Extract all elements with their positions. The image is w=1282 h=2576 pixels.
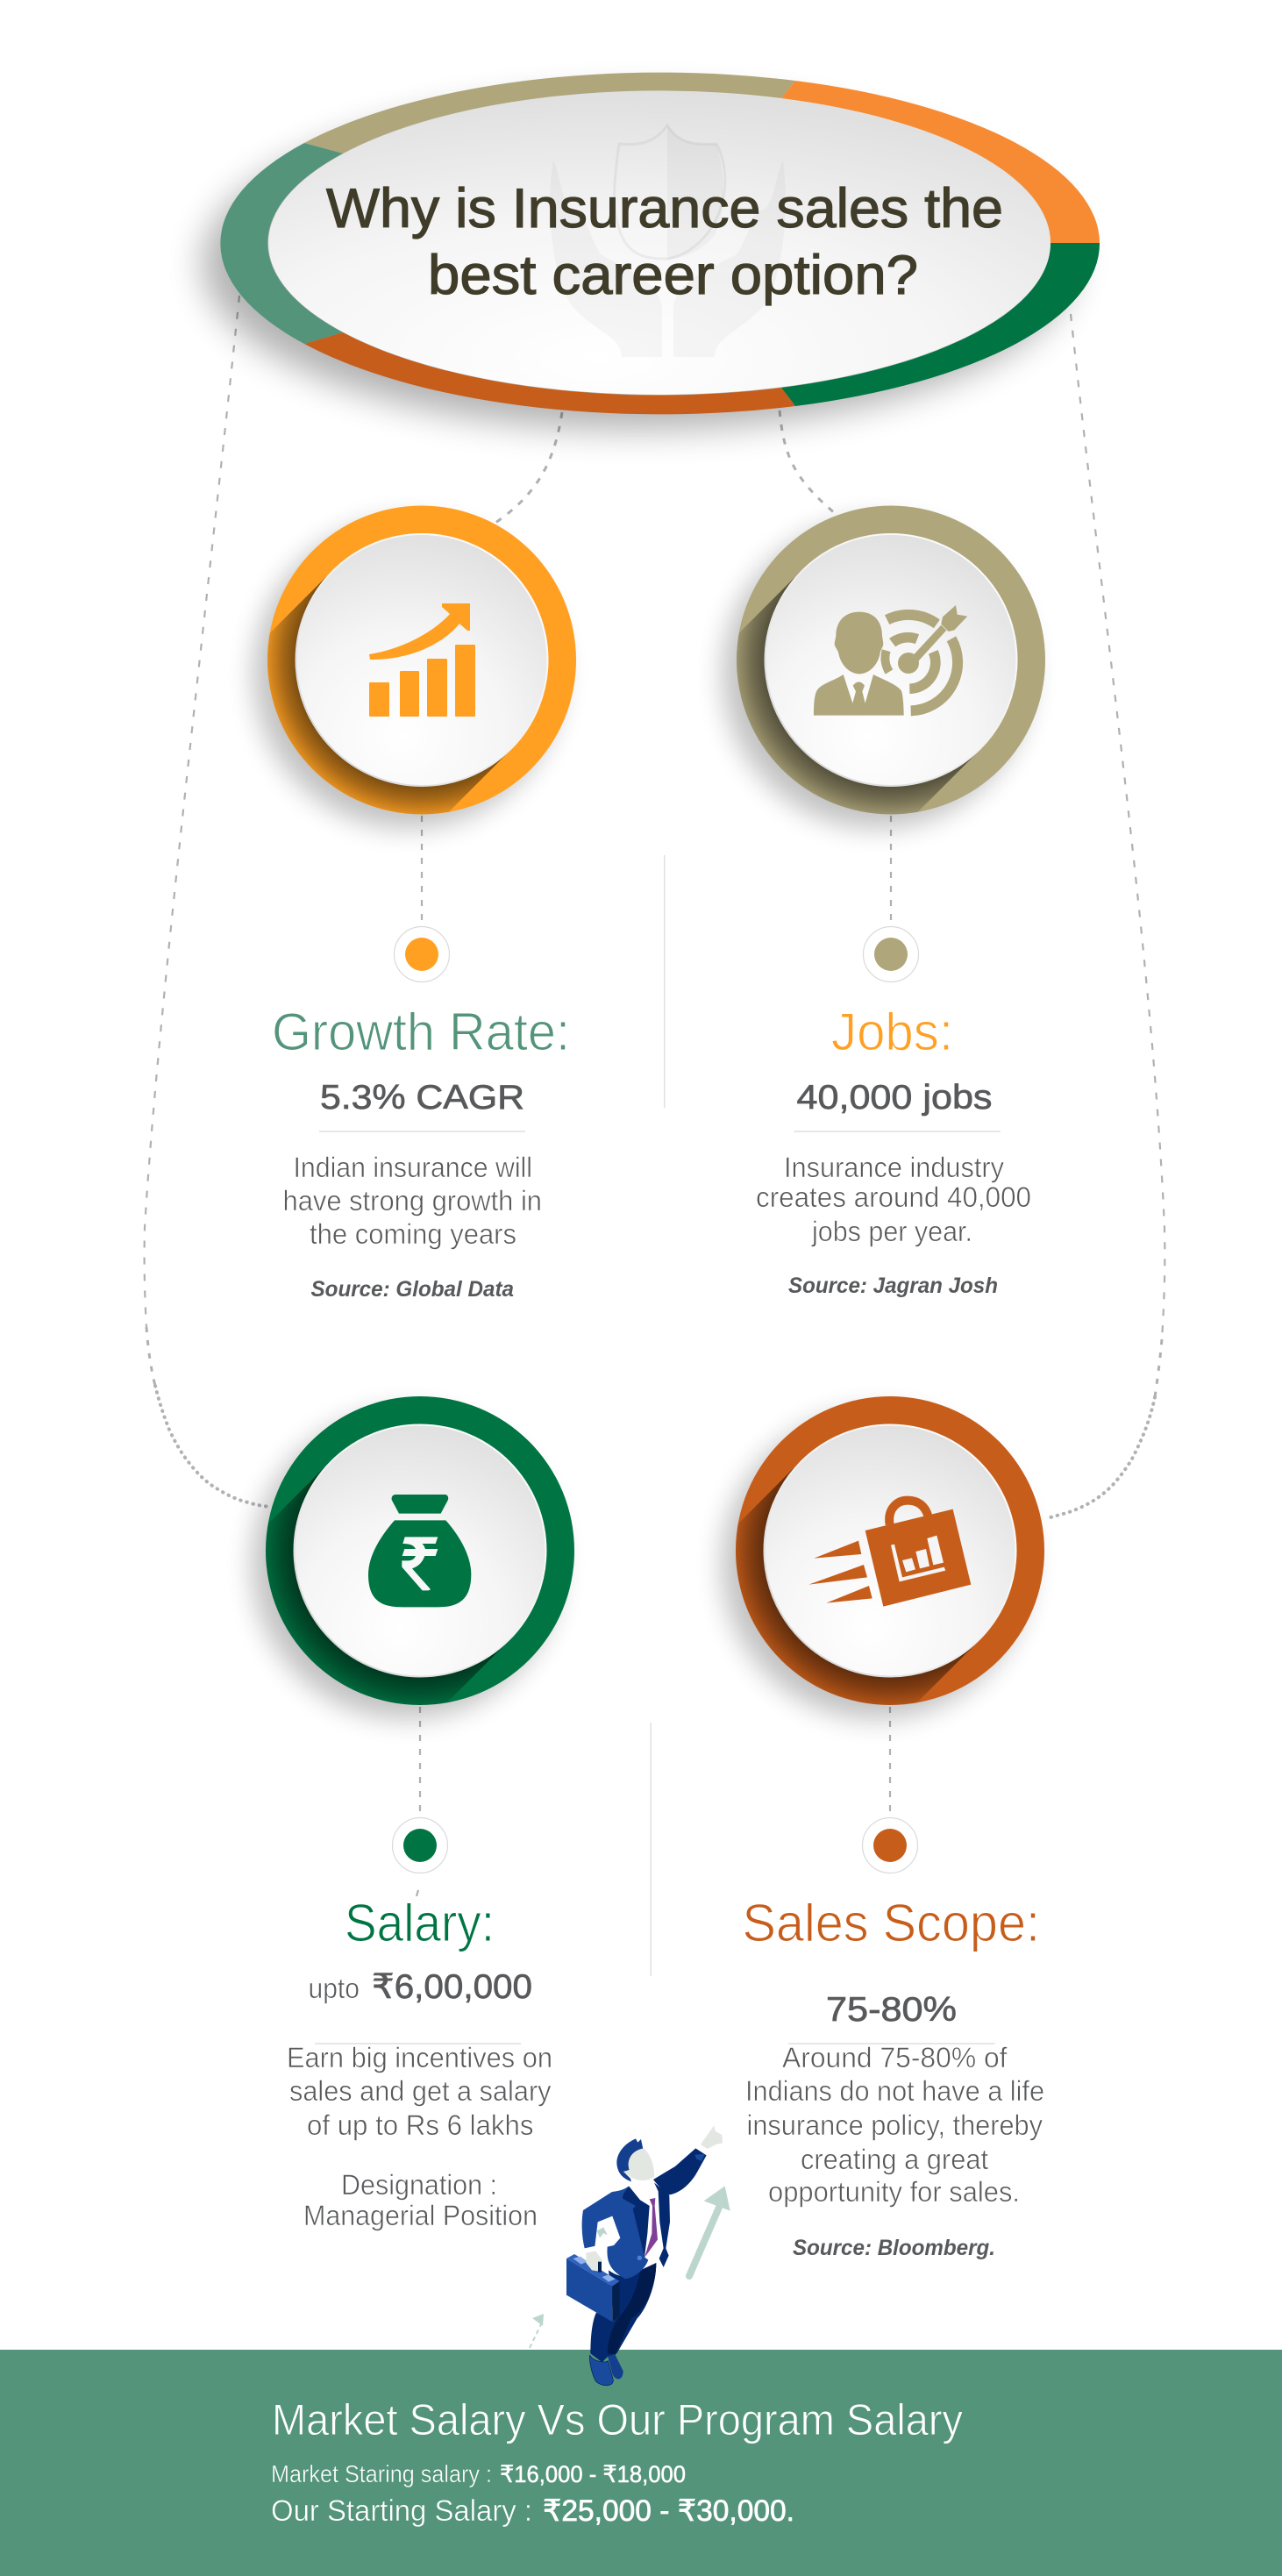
title	[326, 178, 1003, 306]
icon: rupee money bag	[368, 1495, 471, 1607]
heading: sales scope: Sales Scope:	[742, 1894, 1040, 1952]
source: bloomberg: Source: Bloomberg.	[793, 2236, 995, 2260]
rule	[319, 1131, 525, 1132]
stat: CAGR: 5.3% CAGR	[320, 1079, 524, 1117]
panel: sales scope circle	[709, 1396, 1044, 1731]
body: growth rate: Indian insurance will	[293, 1152, 532, 1183]
stat: jobs: 40,000 jobs	[796, 1079, 993, 1117]
source: global data: Source: Global Data	[310, 1277, 514, 1302]
connector: title to jobs circle	[780, 410, 836, 514]
body: sales scope: insurance policy, thereby	[747, 2109, 1043, 2141]
connector: title to sales scope circle	[1046, 314, 1164, 1518]
body: salary	[287, 2042, 552, 2141]
body: growth rate: have strong growth in	[282, 1185, 542, 1217]
body: sales scope: opportunity for sales.	[768, 2176, 1020, 2208]
separator: top row	[664, 855, 665, 1108]
stat: percentage: 75-80%	[826, 1991, 957, 2029]
marker: jobs dot	[863, 926, 919, 982]
connector: tick under salary dot	[417, 1890, 418, 1896]
briefcase	[566, 2254, 620, 2322]
body: designation	[303, 2169, 538, 2231]
connector: title to growth circle	[495, 412, 562, 523]
body: growth rate: the coming years	[310, 1218, 516, 1250]
connector: sales vertical	[889, 1707, 891, 1817]
figure: businessman	[566, 2125, 723, 2386]
body: sales scope	[745, 2042, 1044, 2208]
body: sales scope: Indians do not have a life	[745, 2075, 1044, 2107]
icon: shopping bag with chart	[808, 1501, 971, 1607]
panel: growth circle	[240, 505, 576, 841]
source: jagran josh: Source: Jagran Josh	[788, 1274, 998, 1298]
arrow: small dashed rising	[530, 2314, 544, 2348]
connector: growth vertical	[421, 816, 423, 926]
title: Why is Insurance sales the	[326, 178, 1003, 239]
illustration: businessman with briefcase and arrow	[566, 2125, 730, 2386]
connector: title to salary circle	[145, 296, 270, 1507]
rule	[794, 1131, 1001, 1132]
body: jobs: creates around 40,000	[756, 1181, 1031, 1213]
body: salary: Earn big incentives on	[287, 2042, 552, 2073]
watermark: shield and hands	[550, 125, 786, 357]
stat: salary: ₹6,00,000	[372, 1968, 532, 2006]
ring segment: teal	[220, 143, 343, 344]
program salary line: Our Starting Salary :	[271, 2494, 532, 2528]
stat: salary: upto	[309, 1973, 360, 2004]
panel: jobs text	[756, 1003, 1031, 1298]
body: salary: sales and get a salary	[289, 2075, 551, 2107]
body: sales scope: creating a great	[801, 2144, 988, 2175]
panel: salary comparison band	[0, 2350, 1282, 2576]
inner ellipse	[268, 91, 1051, 395]
body: salary: of up to Rs 6 lakhs	[307, 2109, 533, 2141]
title ellipse	[203, 73, 1100, 430]
rule	[315, 2043, 521, 2044]
heading: jobs: Jobs:	[831, 1003, 953, 1061]
icon: growth chart	[369, 603, 475, 717]
panel: salary text	[287, 1894, 552, 2231]
ring segment: orange	[781, 81, 1100, 243]
marker: growth dot	[395, 926, 449, 982]
heading: salary: Salary:	[345, 1894, 495, 1952]
body: designation: Managerial Position	[303, 2200, 538, 2231]
ring segment: tan	[304, 73, 795, 153]
body: growth rate	[282, 1152, 542, 1250]
connector: jobs vertical	[890, 816, 892, 926]
panel: jobs circle	[710, 505, 1045, 841]
ring segment: green	[781, 243, 1100, 406]
program salary line: ₹25,000 - ₹30,000.	[543, 2494, 794, 2528]
icon: person with target	[814, 605, 967, 716]
market salary line: Market Staring salary :	[271, 2460, 492, 2487]
body: jobs: Insurance industry	[784, 1152, 1004, 1183]
ring segment: rust	[304, 332, 795, 414]
market salary line: ₹16,000 - ₹18,000	[500, 2461, 686, 2487]
title: best career option?	[428, 245, 918, 306]
body: sales scope: Around 75-80% of	[782, 2042, 1008, 2073]
marker: salary dot	[393, 1817, 447, 1873]
body: designation: Designation :	[341, 2169, 497, 2201]
arrow: large rising	[689, 2186, 730, 2276]
program salary line	[271, 2494, 794, 2528]
stat: salary	[309, 1968, 532, 2006]
separator: bottom row	[651, 1723, 652, 1976]
marker: sales dot	[863, 1817, 917, 1873]
panel: growth rate text	[272, 1003, 570, 1302]
body: jobs: jobs per year.	[811, 1216, 972, 1247]
panel: sales scope text	[742, 1894, 1044, 2260]
panel: salary circle	[239, 1396, 574, 1731]
body: jobs	[756, 1152, 1031, 1247]
rule	[788, 2043, 994, 2044]
connector: salary vertical	[419, 1707, 421, 1817]
band heading: Market Salary Vs Our Program Salary	[272, 2395, 963, 2444]
market salary line	[271, 2460, 686, 2487]
heading: growth rate: Growth Rate:	[272, 1003, 570, 1061]
